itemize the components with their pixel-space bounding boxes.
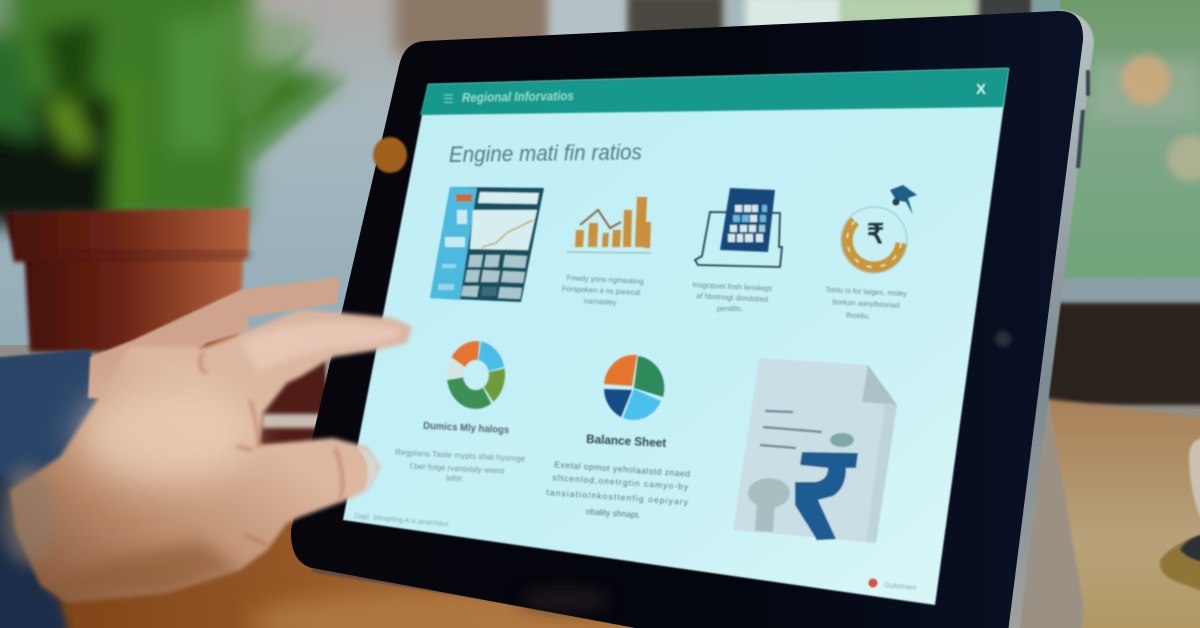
screen header bar (420, 68, 1009, 115)
plant spiky leaf tips (235, 38, 350, 165)
tablet stand (1018, 395, 1084, 628)
caption: rupee ring (825, 285, 907, 321)
caption: keypad: pendits. (717, 304, 743, 313)
donut caption: f.ber folge rvantstaly wsest (410, 462, 505, 476)
caption: rupee ring: thoeliu. (846, 310, 870, 321)
pie caption: tansiatio/nkosttenfig oepiyary (546, 487, 689, 507)
background behind fingers (250, 340, 325, 445)
lower hand shadow (40, 540, 240, 592)
pie caption: sltcenlod,onetrgtin camyo-by (552, 472, 689, 492)
palm and index finger and thumb (10, 310, 412, 603)
icon: rupee ring with graduation cap (841, 185, 917, 273)
pie caption (546, 459, 691, 520)
back-of-hand highlight (80, 385, 250, 485)
tablet bezel (291, 11, 1083, 628)
pie caption: obality shnapt. (586, 506, 641, 520)
back finger (88, 277, 340, 400)
index finger highlight (240, 322, 401, 372)
caption: rupee ring: borkan aanyllstonad (832, 297, 900, 310)
footer note: Dapl. Weapting A is anarmaur (354, 513, 450, 528)
tablet aluminium edge (955, 10, 1094, 628)
pie chart (604, 355, 664, 420)
footer marker: Gultomant (884, 582, 917, 592)
donut caption (395, 448, 526, 483)
tablet side buttons (1076, 70, 1090, 168)
header title: Regional Inforvatios (462, 88, 574, 105)
caption: rupee ring: Tonlu is for laiges, msley (825, 285, 907, 298)
icon: rupee ring with graduation cap: ₹ (867, 219, 884, 249)
tablet lower edge (312, 570, 700, 628)
header icon: menu: ☰ (443, 92, 454, 106)
caption: chart: namastey (584, 296, 617, 307)
pie caption: Exetal opmot yeholaatstd znaed (554, 459, 691, 479)
footer marker (868, 578, 917, 592)
tablet (291, 10, 1094, 628)
caption: keypad (692, 280, 773, 313)
icon: tablet with keypad (695, 188, 782, 267)
caption: chart: Fowdy yons ngmeating (566, 273, 644, 286)
header icon: x glyph: X (976, 81, 986, 98)
donut label: Dumics Mly halogs (423, 421, 510, 436)
caption: chart: Forspoken a ns parecal (562, 284, 641, 297)
sleeve (0, 349, 105, 628)
screen (343, 68, 1009, 605)
icon: bar and line chart (567, 197, 651, 253)
bezel reflection (520, 588, 610, 612)
caption: keypad: Inagopoet fosh lenskept (692, 280, 773, 293)
donut chart (454, 349, 498, 401)
icon: calculator dashboard (430, 187, 544, 302)
window with green bokeh (1045, 0, 1200, 405)
left hand fade (2, 465, 54, 565)
table surface (0, 398, 1200, 628)
plant in pot (0, 0, 350, 352)
shadow creases (200, 352, 342, 545)
donut caption: Regplans Taste mypts shat hysmge (395, 448, 526, 463)
coffee cup and saucer (1160, 438, 1200, 592)
camera dot (995, 331, 1011, 347)
screen title: Engine mati fin ratios (449, 139, 642, 167)
hand (2, 277, 412, 603)
document with rupee symbol (733, 358, 897, 543)
thumbnail (358, 447, 377, 494)
caption: keypad: af hbstnogt dondstied (696, 291, 768, 304)
caption: chart (562, 273, 644, 307)
pie label: Balance Sheet: Balance Sheet (586, 432, 667, 450)
donut caption: lefor. (446, 474, 464, 483)
orange reflection on bezel (373, 137, 407, 173)
